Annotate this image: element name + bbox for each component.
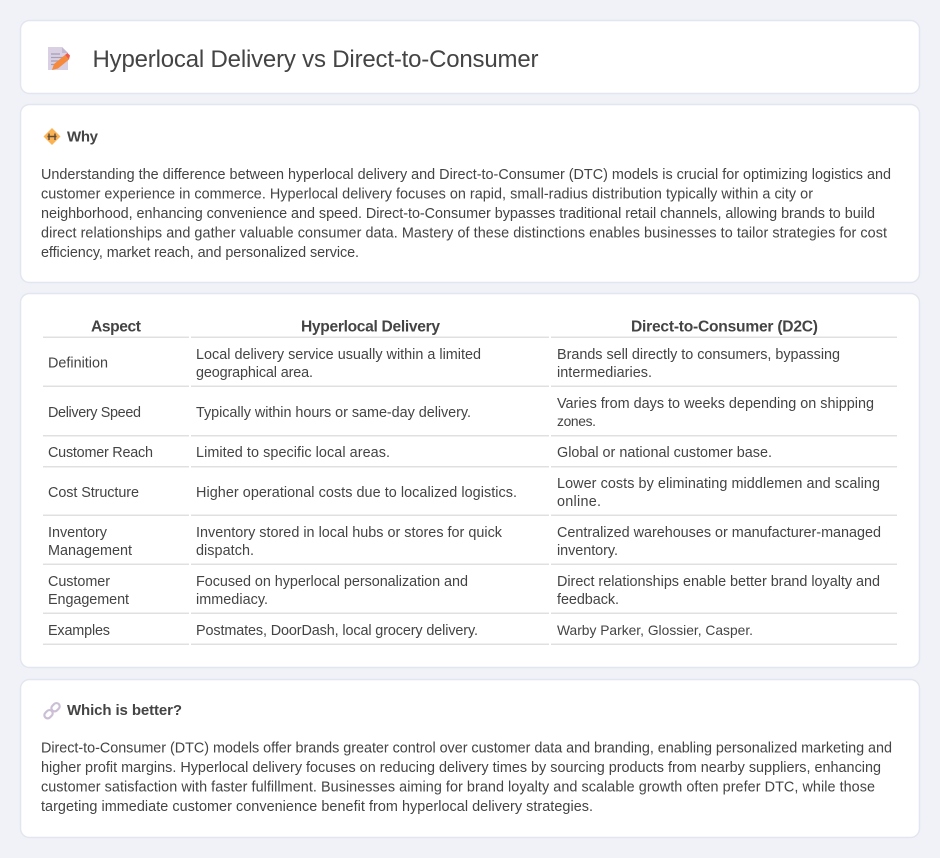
text block: which is better paragraph: Direct-to-Consumer (DTC) models offer brands greater control over customer data and branding, enabling personalized marketing and xyxy=(41,740,892,756)
table row: examples xyxy=(43,623,897,645)
table row: inventory management: Inventory stored in local hubs or stores for quick xyxy=(196,525,503,541)
icon: document with pencil xyxy=(48,47,70,70)
table row: customer engagement: feedback. xyxy=(557,592,619,608)
panel: which is better xyxy=(20,680,920,838)
table row: definition: Definition xyxy=(48,356,108,372)
table row: customer reach: Global or national customer base. xyxy=(557,445,772,461)
heading: why: Why xyxy=(67,128,99,146)
table row: examples: Postmates, DoorDash, local grocery delivery. xyxy=(196,623,478,639)
table row: inventory management: dispatch. xyxy=(196,543,254,559)
text block: which is better paragraph: customer satisfaction with faster fulfillment. Businesses aiming for brand loyalty and scalable growth often prefer DTC, while those xyxy=(41,780,875,796)
table row: inventory management: Management xyxy=(48,543,132,559)
text block: which is better paragraph: targeting immediate customer convenience benefit from hyperlocal delivery strategies. xyxy=(41,799,593,815)
table row: cost structure: online. xyxy=(557,494,601,510)
table row: delivery speed: zones. xyxy=(557,414,596,429)
table row: customer reach: Limited to specific local areas. xyxy=(196,445,390,461)
panel: why xyxy=(20,104,920,282)
text block: which is better paragraph: higher profit margins. Hyperlocal delivery focuses on reducing delivery times by sourcing products from nearby suppliers, enhancing xyxy=(41,760,881,776)
table row: delivery speed: Delivery Speed xyxy=(48,405,141,421)
table row: inventory management xyxy=(43,525,897,565)
table header row: Hyperlocal Delivery xyxy=(301,318,440,336)
text block: why paragraph xyxy=(41,167,891,261)
table row: customer engagement xyxy=(43,574,897,614)
table row: cost structure: Higher operational costs due to localized logistics. xyxy=(196,485,517,501)
table row: delivery speed xyxy=(43,396,897,436)
table row: cost structure: Lower costs by eliminating middlemen and scaling xyxy=(557,476,880,492)
table row: definition: Brands sell directly to consumers, bypassing xyxy=(557,347,840,363)
text block: why paragraph: direct relationships and gather valuable consumer data. Mastery of these distinctions enables businesses to tailor strategies for cost xyxy=(41,226,887,242)
table row: definition: intermediaries. xyxy=(557,365,652,381)
table row: inventory management: Centralized warehouses or manufacturer-managed xyxy=(557,525,881,541)
table row: inventory management: inventory. xyxy=(557,543,618,559)
table row: examples: Warby Parker, Glossier, Casper. xyxy=(557,623,753,638)
table row: definition xyxy=(43,347,897,387)
heading: which is better: Which is better? xyxy=(67,702,182,719)
table header row: Aspect xyxy=(91,318,141,336)
table row: customer engagement: Engagement xyxy=(48,592,129,608)
panel: comparison table xyxy=(20,294,920,668)
table row: cost structure xyxy=(43,476,897,516)
text block: why paragraph: efficiency, market reach, and personalized service. xyxy=(41,245,359,261)
table header row: Direct-to-Consumer (D2C) xyxy=(631,318,818,336)
table row: customer engagement: immediacy. xyxy=(196,592,268,608)
text block: which is better paragraph xyxy=(41,740,892,815)
text block: why paragraph: customer experience in commerce. Hyperlocal delivery focuses on rapid, small-radius distribution typically within a city or xyxy=(41,186,813,202)
table row: customer reach: Customer Reach xyxy=(48,445,153,461)
table row: definition: geographical area. xyxy=(196,365,313,381)
panel: title header xyxy=(20,20,920,94)
table row: delivery speed: Varies from days to weeks depending on shipping xyxy=(557,396,874,412)
text block: why paragraph: Understanding the difference between hyperlocal delivery and Direct-to-Consumer (DTC) models is crucial for optimizing logistics and xyxy=(41,167,891,183)
icon: orange diamond sign xyxy=(44,128,60,145)
table row: customer engagement: Customer xyxy=(48,574,110,590)
table row: examples: Examples xyxy=(48,623,110,639)
table row: customer reach xyxy=(43,445,897,468)
table row: definition: Local delivery service usually within a limited xyxy=(196,347,481,363)
table row: inventory management: Inventory xyxy=(48,525,108,541)
table row: delivery speed: Typically within hours or same-day delivery. xyxy=(196,405,471,421)
title: Hyperlocal Delivery vs Direct-to-Consumer xyxy=(92,46,538,73)
table row: customer engagement: Direct relationships enable better brand loyalty and xyxy=(557,574,880,590)
table row: customer engagement: Focused on hyperlocal personalization and xyxy=(196,574,468,590)
table header row xyxy=(43,318,897,338)
text block: why paragraph: neighborhood, enhancing convenience and speed. Direct-to-Consumer bypasses traditional retail channels, allowing brands to build xyxy=(41,206,875,222)
table row: cost structure: Cost Structure xyxy=(48,485,139,501)
icon: chain link xyxy=(43,702,61,720)
